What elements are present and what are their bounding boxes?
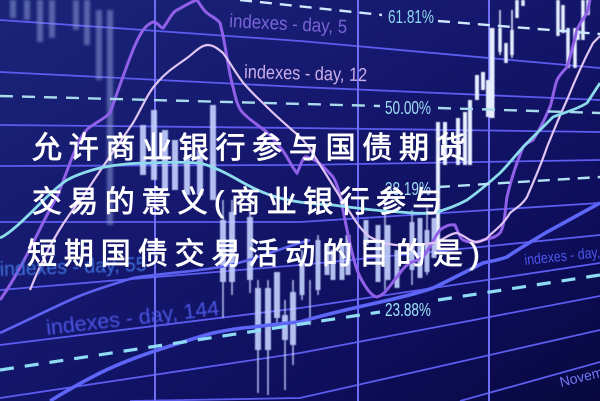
series label day 55: indexes - day, 55	[0, 254, 147, 281]
title: 短期国债交易活动的目的是)	[27, 238, 487, 271]
series label day 12: indexes - day, 12	[244, 62, 367, 86]
curve: 55 day moving average	[0, 83, 600, 238]
level label 61.81%: 61.81%	[388, 7, 434, 27]
curve: 144 day moving average	[50, 203, 600, 401]
candlesticks middle	[143, 105, 434, 395]
candlesticks upper right	[438, 0, 588, 250]
faded candlesticks top left	[13, 0, 110, 225]
curve: 5 day moving average	[0, 0, 590, 300]
level label 23.88%: 23.88%	[385, 300, 431, 320]
level label 38.19%: 38.19%	[385, 179, 431, 199]
title	[27, 132, 487, 271]
series label day 5: indexes - day, 5	[229, 11, 348, 38]
series label day 144: indexes - day, 144	[45, 297, 221, 340]
curve: 12 day moving average	[30, 36, 600, 290]
title: 允许商业银行参与国债期货	[32, 132, 472, 165]
title: 交易的意义(商业银行参与	[32, 186, 449, 219]
curve: long average	[0, 240, 310, 333]
level label 50.00%: 50.00%	[385, 98, 431, 118]
